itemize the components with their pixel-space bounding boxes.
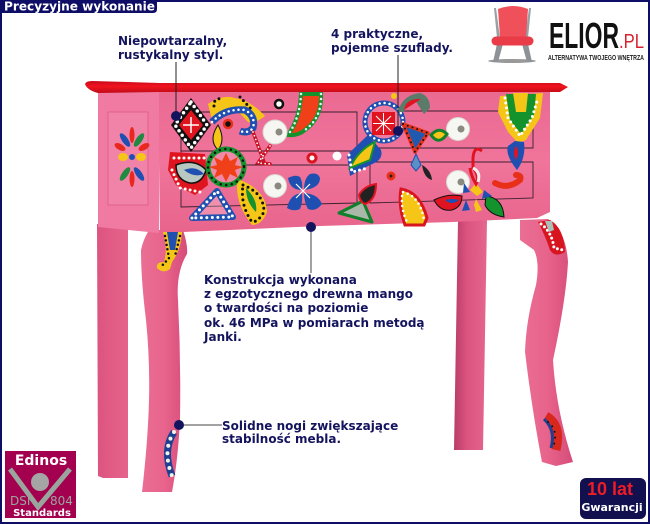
grey top paisley (391, 93, 430, 114)
callout: legs: Solidne nogi zwiększające (222, 419, 398, 433)
badge: Edinos DSI 804 Standards: Standards (13, 508, 71, 519)
small circles (224, 100, 394, 179)
leg ornament: red and blue (544, 416, 558, 450)
badge: Edinos DSI 804 Standards (5, 451, 76, 519)
bottom green triangle ornament (339, 184, 376, 222)
badge: 10 lat Gwarancji: 10 lat (587, 479, 633, 499)
blue clover ornament (287, 174, 322, 210)
table body: side (98, 92, 159, 233)
badge: 10 lat Gwarancji (580, 478, 646, 519)
butterfly ornament (434, 149, 520, 217)
orange triangle ornament (403, 124, 447, 180)
callout: construction: ok. 46 MPa w pomiarach metodą (204, 316, 424, 330)
green flower ornament (208, 149, 244, 185)
front right curved leg (520, 219, 573, 466)
blue triangle ornament (192, 191, 233, 218)
red paisley ornament (168, 152, 208, 195)
callout: rustic style (118, 34, 227, 121)
side flower ornament (113, 127, 151, 187)
callout: rustic style: Niepowtarzalny, (118, 34, 227, 48)
drawer outlines (181, 111, 533, 207)
back left leg (97, 224, 128, 478)
large top right ornament (498, 93, 543, 170)
callout: drawers: 4 praktyczne, (331, 27, 423, 41)
dotted red chain (253, 132, 270, 164)
yellow paisley with blue hook (208, 97, 265, 150)
badge: 10 lat Gwarancji: Gwarancji (581, 501, 643, 514)
back right leg (454, 220, 487, 450)
callout: construction: z egzotycznego drewna mango (204, 287, 413, 301)
logo: Elior.pl: .PL (619, 31, 644, 53)
leg ornament: yellow paisley (157, 232, 182, 271)
table top (85, 81, 568, 93)
yellow leaf ornament (237, 180, 267, 225)
callout: construction: Janki. (203, 330, 242, 344)
logo: Elior.pl (488, 6, 644, 63)
side panel (108, 112, 148, 205)
callout: drawers: pojemne szuflady. (331, 41, 453, 55)
yellow paisley bottom (400, 189, 427, 225)
front left curved leg (141, 230, 187, 492)
badge: Edinos DSI 804 Standards: DSI (10, 494, 30, 508)
callout: drawers (331, 27, 453, 136)
callout: rustic style: rustykalny styl. (118, 48, 223, 62)
icon: red chair (488, 6, 536, 63)
badge: Edinos DSI 804 Standards: Edinos (15, 453, 67, 469)
top left green leaf ornament (288, 94, 321, 135)
white drawer knobs (263, 118, 470, 198)
leg ornament: red and white (538, 220, 565, 255)
leg ornament: blue arc (167, 432, 174, 476)
callout: construction (203, 222, 424, 344)
diamond ornament (171, 98, 211, 152)
callout: construction: Konstrukcja wykonana (204, 273, 357, 287)
callout: legs (174, 419, 398, 446)
callout: construction: o twardości na poziomie (204, 301, 368, 315)
table body: front (158, 92, 550, 233)
callout: legs: stabilność mebla. (222, 432, 341, 446)
badge: Edinos DSI 804 Standards: 804 (50, 494, 73, 508)
blue and yellow flame ornament (347, 135, 382, 176)
table illustration (85, 81, 573, 492)
blue ring with red square ornament (365, 103, 403, 141)
